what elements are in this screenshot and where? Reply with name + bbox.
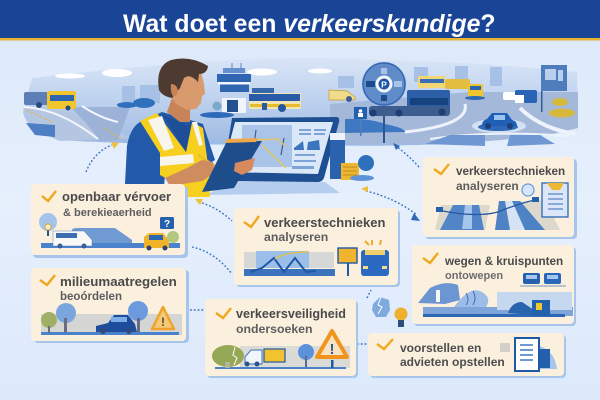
dark bus and limousine [369,90,450,116]
card: verkeersveiligheid [205,299,358,378]
binder and box [330,133,374,181]
card: verkeerstechnieken middle [234,208,400,287]
control tower [217,63,251,113]
tablet [222,117,339,182]
pen [198,155,220,169]
torso shirt [125,112,215,197]
yellow bus left [24,91,76,110]
road right [330,92,578,144]
yellow buses back [418,76,485,100]
writing hand and forearm [165,160,215,186]
card: milieumaatregelen: milieumaatregelen [60,274,177,289]
parking roundabout sign: P [381,80,387,90]
street scene panorama [23,58,578,146]
stand shadow [205,182,340,195]
check mark [216,308,231,318]
check mark [40,275,55,285]
road left [23,108,130,141]
arrowheads [111,142,420,221]
clipboard [202,141,262,192]
card: verkeersveiligheid: verkeersveiligheid [236,307,346,321]
card: milieumaatregelen [31,268,189,343]
pedestrian sign [354,107,367,136]
vehicles illustration [39,213,180,250]
parking roundabout sign [362,62,406,143]
check mark [42,191,56,201]
crack icon [372,297,390,317]
blue car on roundabout [478,113,518,131]
card: voorstellen en adviezen: advieten opstellen [400,355,505,369]
card: wegen en kruispunten [412,245,576,326]
safety illustration [212,331,350,369]
card: verkeerstechnieken middle: analyseren [264,230,328,244]
yellow cars right [549,98,575,118]
neck [167,98,190,122]
card: voorstellen en adviezen [368,333,566,378]
card: openbaar vervoer: openbaar vérvoer [62,189,171,204]
coach [249,88,301,112]
card: verkeerstechnieken right: analyseren [456,179,519,193]
dashed connector arrows [86,145,419,344]
document icon [500,338,557,371]
check mark [377,339,393,349]
white and blue vehicles [503,90,537,103]
vehicles illustration: ? [164,219,170,230]
card: wegen en kruispunten: wegen & kruispunten [444,255,563,268]
roads illustration [435,183,568,230]
blue bushes [117,98,155,108]
nature and car illustration: ! [161,315,165,329]
clouds [55,68,332,78]
nature and car illustration [41,301,182,335]
card: verkeerstechnieken right [423,157,577,239]
card: milieumaatregelen: beoórdelen [60,291,122,303]
card: verkeerstechnieken right: verkeerstechnieken [456,165,565,178]
skyline [122,66,502,103]
card: openbaar vervoer [31,184,188,258]
ear [171,84,178,96]
check mark [434,164,449,174]
title banner: Wat doet een verkeerskundige? [123,11,496,38]
card: verkeerstechnieken middle: verkeerstechnieken [264,215,385,230]
title banner [0,0,600,40]
safety illustration: ! [330,341,334,358]
road works illustration [418,273,573,317]
card: wegen en kruispunten: ontowepen [445,270,503,282]
face [168,68,205,110]
light bulb icon [394,308,408,327]
card: openbaar vervoer: & berekieaerheid [63,207,152,219]
small tree [200,102,234,118]
holding hand [234,158,255,175]
card: voorstellen en adviezen: voorstellen en [400,341,481,355]
hair [158,58,208,98]
bridge illustration [244,240,389,276]
check mark [244,216,259,227]
information board [541,65,567,112]
hi-vis vest [140,113,210,197]
check mark [423,253,438,263]
card: verkeersveiligheid: ondersoeken [236,322,313,336]
professional with vest and clipboard [125,58,374,197]
yellow van [329,90,355,102]
